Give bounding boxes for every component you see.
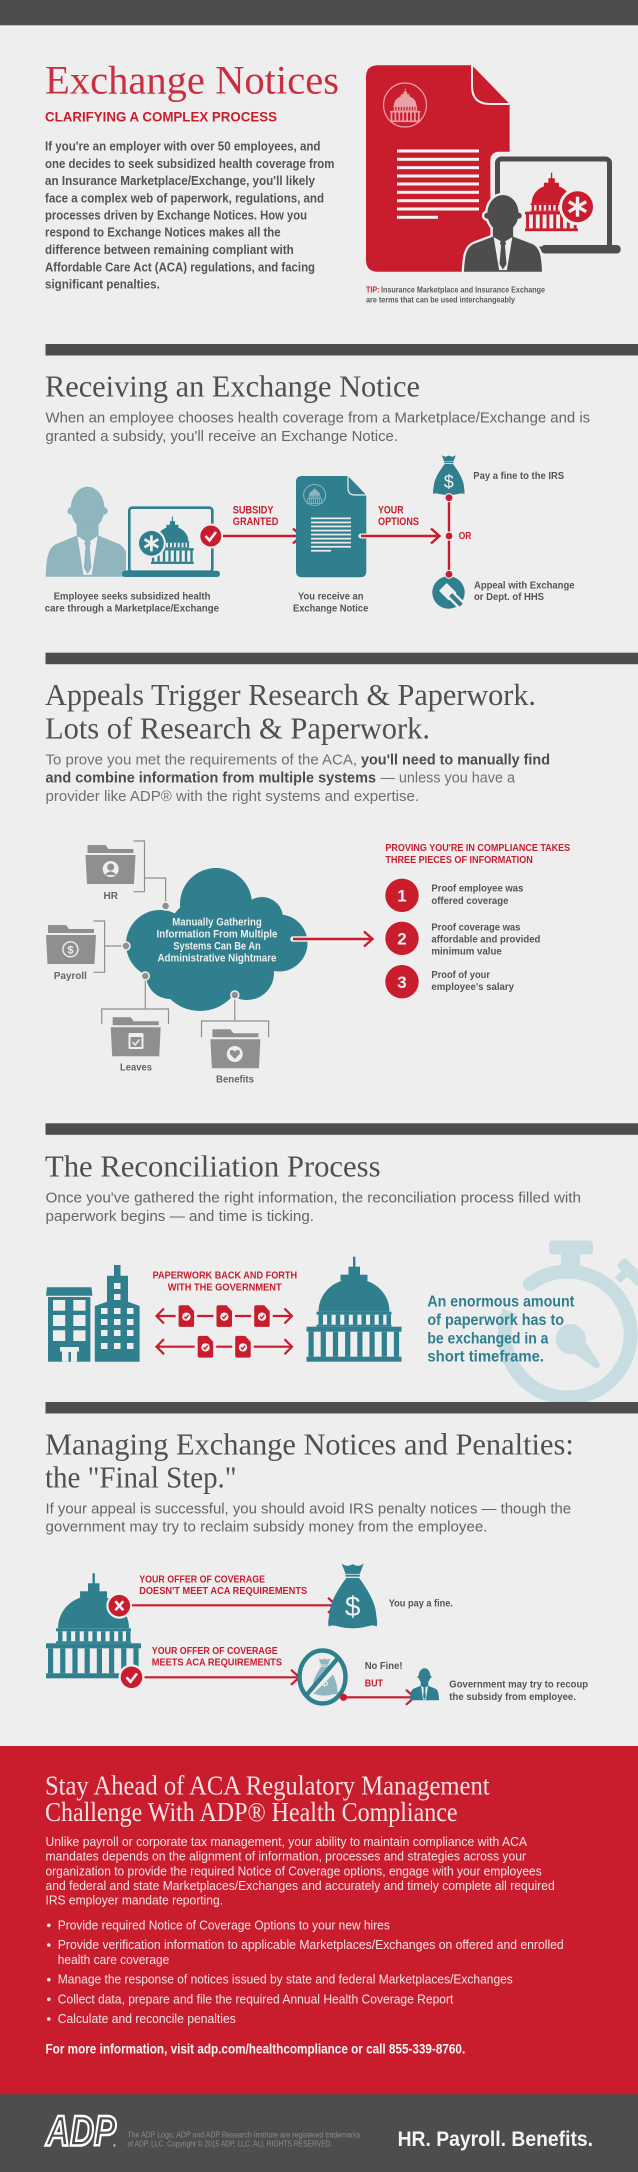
right building bbox=[95, 1265, 140, 1362]
item 1: Proof employee was bbox=[431, 883, 524, 895]
folder: Payroll: Payroll bbox=[54, 971, 87, 982]
label: or: OR bbox=[459, 530, 472, 542]
item 2 bbox=[385, 921, 540, 957]
reconciliation description: Once you've gathered the right information, the reconciliation process filled with bbox=[46, 1191, 581, 1207]
panel: footer bbox=[0, 2094, 638, 2172]
document lines bbox=[397, 150, 479, 219]
document sheet bbox=[366, 65, 510, 272]
label: your options: OPTIONS bbox=[378, 516, 419, 528]
heading: managing bbox=[45, 1426, 574, 1495]
ADP logo: ® bbox=[113, 2143, 116, 2148]
cloud label: Systems Can Be An bbox=[173, 941, 261, 953]
heading: receiving: Receiving an Exchange Notice bbox=[45, 369, 420, 404]
option: appeal: Appeal with Exchange bbox=[474, 579, 575, 591]
callout: timeframe: of paperwork has to bbox=[427, 1312, 564, 1329]
icon: no money: $ bbox=[321, 1674, 329, 1689]
laptop bbox=[490, 152, 621, 254]
employee silhouette bbox=[46, 487, 130, 577]
item 2: 2 bbox=[397, 930, 407, 948]
caption: notice: You receive an bbox=[298, 590, 364, 602]
icon: office buildings bbox=[46, 1265, 140, 1362]
panel body: and federal and state Marketplaces/Exchanges and accurately and timely complete all required bbox=[46, 1878, 555, 1893]
icon: money bag bbox=[433, 455, 465, 495]
result: pay a fine: You pay a fine. bbox=[389, 1598, 453, 1610]
callout: timeframe: An enormous amount bbox=[427, 1294, 574, 1311]
arrow: your options bbox=[361, 528, 440, 544]
panel body bbox=[46, 1834, 555, 1908]
label: paperwork back and forth: PAPERWORK BACK AND FORTH bbox=[153, 1269, 297, 1281]
folder: HR bbox=[86, 845, 136, 902]
managing description bbox=[46, 1501, 571, 1536]
caption: employee bbox=[45, 590, 219, 615]
caption: employee: care through a Marketplace/Exchange bbox=[45, 603, 219, 615]
callout: timeframe: short timeframe. bbox=[427, 1349, 544, 1366]
section bar bbox=[46, 1123, 638, 1135]
document seal bbox=[384, 83, 426, 127]
exchange arrows with documents bbox=[156, 1305, 292, 1358]
panel heading: Challenge With ADP® Health Compliance bbox=[45, 1797, 458, 1827]
ADP logo: ADP bbox=[45, 2108, 116, 2156]
intro text block: If you're an employer with over 50 employees, and bbox=[45, 139, 320, 154]
heading: reconciliation: The Reconciliation Process bbox=[45, 1149, 380, 1184]
capitol building bbox=[151, 517, 194, 564]
item 2: Proof coverage was bbox=[431, 921, 521, 933]
legal text: of ADP, LLC. Copyright © 2015 ADP, LLC. ALL RIGHTS RESERVED. bbox=[127, 2140, 332, 2149]
label: your options bbox=[378, 504, 419, 528]
icon: exchange notice document bbox=[296, 476, 366, 577]
panel: ADP health compliance bbox=[0, 1746, 638, 2094]
bullet list: health care coverage bbox=[58, 1952, 169, 1967]
heading: managing: Managing Exchange Notices and Penalties: bbox=[45, 1426, 574, 1461]
reconciliation description bbox=[46, 1191, 581, 1225]
result: no fine: No Fine! bbox=[365, 1660, 402, 1672]
managing description: If your appeal is successful, you should avoid IRS penalty notices — though the bbox=[46, 1501, 571, 1517]
capitol building bbox=[46, 1573, 141, 1678]
icon: no money bbox=[300, 1650, 346, 1704]
item 1: offered coverage bbox=[431, 895, 509, 907]
cloud label: Information From Multiple bbox=[156, 928, 278, 940]
icon: large money bag: $ bbox=[345, 1591, 361, 1622]
heading: three pieces of information: THREE PIECES OF INFORMATION bbox=[385, 854, 533, 866]
panel body: organization to provide the required Notice of Coverage options, engage with your employees bbox=[46, 1863, 542, 1878]
medical star badge bbox=[559, 188, 596, 225]
appeals description: you'll need to manually find bbox=[361, 752, 550, 768]
badge: pass bbox=[118, 1664, 144, 1690]
result: recoup: the subsidy from employee. bbox=[449, 1691, 576, 1703]
label: meets: MEETS ACA REQUIREMENTS bbox=[152, 1656, 282, 1668]
panel body: IRS employer mandate reporting. bbox=[46, 1893, 223, 1908]
option: pay a fine: Pay a fine to the IRS bbox=[473, 471, 564, 482]
icon: money bag: $ bbox=[444, 472, 454, 492]
receiving description: When an employee chooses health coverage from a Marketplace/Exchange and is bbox=[46, 411, 590, 427]
receiving description: granted a subsidy, you'll receive an Exchange Notice. bbox=[46, 429, 398, 445]
label: subsidy granted: GRANTED bbox=[233, 516, 278, 528]
connector brackets bbox=[94, 841, 269, 1037]
option: appeal bbox=[474, 579, 575, 603]
label: does not meet bbox=[139, 1574, 307, 1597]
legal text bbox=[127, 2131, 360, 2149]
top bar bbox=[0, 0, 638, 25]
caption: notice bbox=[293, 590, 368, 615]
icon: red notice document with laptop and person bbox=[366, 65, 621, 272]
reconciliation description: paperwork begins — and time is ticking. bbox=[46, 1209, 314, 1225]
icon: small employee bbox=[410, 1668, 439, 1700]
section bar bbox=[46, 1402, 638, 1414]
laptop bbox=[122, 504, 220, 577]
badge: fail bbox=[106, 1593, 132, 1619]
heading: managing: the "Final Step." bbox=[45, 1460, 237, 1495]
label: your options: YOUR bbox=[378, 504, 404, 516]
icon: capitol building bbox=[306, 1257, 402, 1362]
appeals description: provider like ADP® with the right systems and expertise. bbox=[46, 789, 419, 805]
result: but: BUT bbox=[365, 1677, 383, 1689]
callout: timeframe bbox=[427, 1294, 574, 1366]
folder: Leaves bbox=[111, 1017, 161, 1074]
tip note: are terms that can be used interchangeably bbox=[366, 295, 515, 305]
arrow: subsidy granted bbox=[223, 528, 302, 544]
callout: timeframe: be exchanged in a bbox=[427, 1330, 549, 1347]
icon: stopwatch watermark bbox=[505, 1240, 638, 1398]
intro text block: processes driven by Exchange Notices. How you bbox=[45, 208, 307, 223]
icon: employee with laptop bbox=[46, 487, 223, 577]
item 2: affordable and provided bbox=[431, 933, 540, 945]
tip note: TIP: bbox=[366, 285, 380, 295]
label: paperwork back and forth bbox=[153, 1269, 297, 1294]
item 3: employee's salary bbox=[431, 981, 514, 993]
bullet list: Collect data, prepare and file the required Annual Health Coverage Report bbox=[58, 1991, 454, 2006]
item 3: Proof of your bbox=[431, 969, 490, 981]
icon: large money bag bbox=[328, 1563, 377, 1628]
item 3: 3 bbox=[397, 973, 407, 992]
caption: notice: Exchange Notice bbox=[293, 603, 368, 615]
bullet list: Manage the response of notices issued by state and federal Marketplaces/Exchanges bbox=[58, 1972, 513, 1987]
title: Exchange Notices bbox=[45, 57, 339, 102]
label: does not meet: DOESN'T MEET ACA REQUIREMENTS bbox=[139, 1585, 307, 1597]
arrow row 2 bbox=[156, 1336, 292, 1358]
intro text block: one decides to seek subsidized health coverage from bbox=[45, 156, 334, 171]
appeals description: To prove you met the requirements of the ACA, bbox=[46, 752, 357, 768]
tagline: HR. Payroll. Benefits. bbox=[398, 2128, 593, 2151]
folder: Benefits: Benefits bbox=[216, 1075, 254, 1086]
heading: appeals: Lots of Research & Paperwork. bbox=[45, 710, 430, 745]
item 3 bbox=[385, 965, 514, 998]
folder: Benefits bbox=[210, 1029, 260, 1086]
panel heading bbox=[45, 1770, 490, 1827]
label: meets bbox=[152, 1645, 282, 1668]
appeals description: and combine information from multiple systems bbox=[46, 771, 376, 787]
label: meets: YOUR OFFER OF COVERAGE bbox=[152, 1645, 278, 1657]
result: recoup bbox=[449, 1679, 588, 1703]
heading: appeals bbox=[45, 677, 536, 745]
result: recoup: Government may try to recoup bbox=[449, 1679, 588, 1691]
bullet list: Provide verification information to applicable Marketplaces/Exchanges on offered and enrolled bbox=[58, 1937, 564, 1952]
managing description: government may try to reclaim subsidy money from the employee. bbox=[46, 1520, 488, 1536]
cloud: manually gathering information bbox=[126, 868, 308, 1011]
bullet list: Provide required Notice of Coverage Options to your new hires bbox=[58, 1917, 390, 1932]
cloud label: Administrative Nightmare bbox=[158, 953, 276, 965]
folder: HR: HR bbox=[103, 891, 119, 902]
panel body: Unlike payroll or corporate tax management, your ability to maintain compliance with ACA bbox=[46, 1834, 527, 1849]
option: appeal: or Dept. of HHS bbox=[474, 591, 544, 603]
intro text block bbox=[45, 139, 334, 291]
tip note: Insurance Marketplace and Insurance Exchange bbox=[381, 285, 545, 295]
appeals description: — unless you have a bbox=[380, 771, 516, 787]
check badge bbox=[198, 524, 223, 548]
section bar bbox=[46, 653, 638, 664]
item 1: 1 bbox=[397, 886, 407, 906]
label: does not meet: YOUR OFFER OF COVERAGE bbox=[139, 1574, 265, 1586]
subtitle: CLARIFYING A COMPLEX PROCESS bbox=[45, 109, 277, 125]
heading: appeals: Appeals Trigger Research & Paperwork. bbox=[45, 677, 536, 712]
label: paperwork back and forth: WITH THE GOVERNMENT bbox=[168, 1282, 282, 1294]
tip note bbox=[366, 285, 545, 305]
decision line bbox=[445, 494, 453, 578]
person silhouette bbox=[464, 195, 542, 272]
heading: three pieces of information bbox=[385, 842, 570, 866]
folder: Leaves: Leaves bbox=[120, 1063, 152, 1074]
icon: capitol with outcome badges bbox=[46, 1573, 144, 1690]
intro text block: significant penalties. bbox=[45, 276, 160, 291]
heading: three pieces of information: PROVING YOU'RE IN COMPLIANCE TAKES bbox=[385, 842, 570, 854]
item 1 bbox=[385, 879, 524, 912]
icon: gavel bbox=[432, 576, 466, 610]
caption: employee: Employee seeks subsidized health bbox=[54, 590, 210, 602]
intro text block: Affordable Care Act (ACA) regulations, and facing bbox=[45, 259, 315, 274]
cloud label bbox=[156, 916, 278, 965]
bullet list bbox=[47, 1917, 564, 2026]
intro text block: respond to Exchange Notices makes all the bbox=[45, 225, 281, 240]
receiving description bbox=[46, 411, 590, 445]
section bar bbox=[46, 344, 638, 356]
arrow: recoup bbox=[340, 1690, 414, 1705]
legal text: The ADP Logo, ADP and ADP Research Institute are registered trademarks bbox=[127, 2131, 360, 2140]
arrow row 1 bbox=[156, 1305, 292, 1327]
call to action: For more information, visit adp.com/healthcompliance or call 855-339-8760. bbox=[46, 2041, 465, 2056]
arrow: does not meet bbox=[132, 1598, 336, 1613]
left building bbox=[46, 1287, 92, 1362]
panel body: mandates depends on the alignment of information, processes and strategies across your bbox=[46, 1849, 527, 1864]
capitol building bbox=[525, 173, 578, 231]
panel heading: Stay Ahead of ACA Regulatory Management bbox=[45, 1770, 490, 1800]
intro text block: difference between remaining compliant with bbox=[45, 242, 294, 257]
arrow: meets bbox=[144, 1670, 300, 1685]
intro text block: an Insurance Marketplace/Exchange, you'll likely bbox=[45, 173, 316, 188]
cloud label: Manually Gathering bbox=[172, 916, 262, 928]
medical star badge bbox=[137, 529, 166, 558]
bullet list: Calculate and reconcile penalties bbox=[58, 2011, 236, 2026]
label: subsidy granted bbox=[233, 504, 278, 528]
connector dots bbox=[122, 902, 239, 999]
folder: Payroll: $ bbox=[67, 944, 73, 956]
item 2: minimum value bbox=[431, 945, 502, 957]
folder: Payroll bbox=[46, 925, 96, 982]
cloud shape bbox=[126, 868, 308, 1011]
intro text block: face a complex web of paperwork, regulations, and bbox=[45, 190, 324, 205]
label: subsidy granted: SUBSIDY bbox=[233, 504, 274, 516]
appeals description bbox=[46, 752, 550, 805]
arrow: cloud to requirements bbox=[293, 932, 372, 946]
